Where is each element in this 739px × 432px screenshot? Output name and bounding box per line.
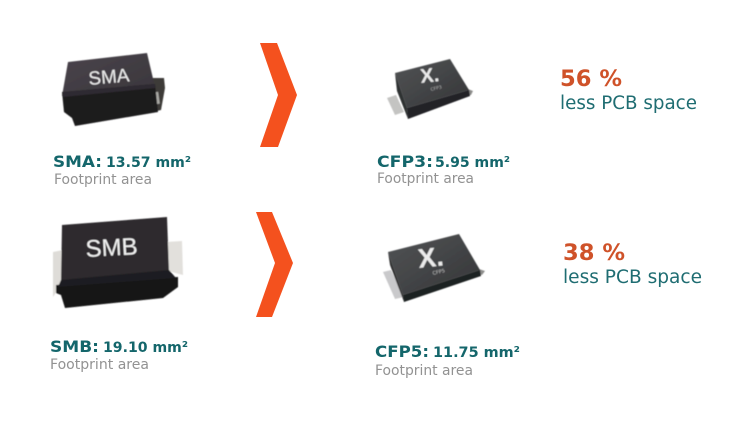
panel: CFP3 package	[377, 59, 510, 187]
label: CFP5 footprint: CFP5:	[375, 342, 429, 361]
callout: 38 % less PCB space: less PCB space	[563, 267, 702, 288]
icon: SMB chip	[53, 217, 183, 308]
caption: CFP3 footprint area: Footprint area	[377, 171, 474, 187]
panel: CFP5 package: 11.75 mm²	[433, 345, 520, 361]
panel: SMB package	[50, 217, 188, 373]
icon: CFP5 chip: CFP5	[432, 268, 446, 277]
panel: CFP3 package: 5.95 mm²	[435, 155, 510, 171]
panel: CFP5 package	[375, 234, 520, 379]
label: SMB footprint: SMB:	[50, 337, 99, 356]
callout: 38 % less PCB space: 38 %	[563, 241, 625, 266]
arrow: SMB to CFP5	[256, 212, 293, 317]
icon: CFP3 chip: CFP3	[430, 84, 443, 93]
caption: SMB footprint area: Footprint area	[50, 357, 149, 373]
icon: CFP5 chip	[383, 234, 485, 302]
icon: CFP3 chip: X.	[419, 64, 440, 88]
callout: 56 % less PCB space: 56 %	[560, 67, 622, 92]
icon: SMA chip: SMA	[88, 65, 131, 90]
icon: SMB chip: SMB	[85, 233, 138, 263]
panel: SMA package	[53, 53, 191, 188]
callout: 56 % less PCB space: less PCB space	[560, 93, 697, 114]
label: SMA footprint: SMA:	[53, 152, 102, 171]
caption: SMA footprint area: Footprint area	[54, 172, 152, 188]
callout: 56 % less PCB space	[560, 67, 697, 114]
panel: SMB package: 19.10 mm²	[103, 340, 188, 356]
icon: CFP3 chip	[387, 59, 473, 119]
callout: 38 % less PCB space	[563, 241, 702, 288]
icon: CFP5 chip: X.	[416, 241, 445, 274]
panel: SMA package: 13.57 mm²	[106, 155, 191, 171]
label: CFP3 footprint: CFP3:	[377, 152, 433, 171]
arrow: SMA to CFP3	[260, 43, 297, 147]
caption: CFP5 footprint area: Footprint area	[375, 363, 473, 379]
